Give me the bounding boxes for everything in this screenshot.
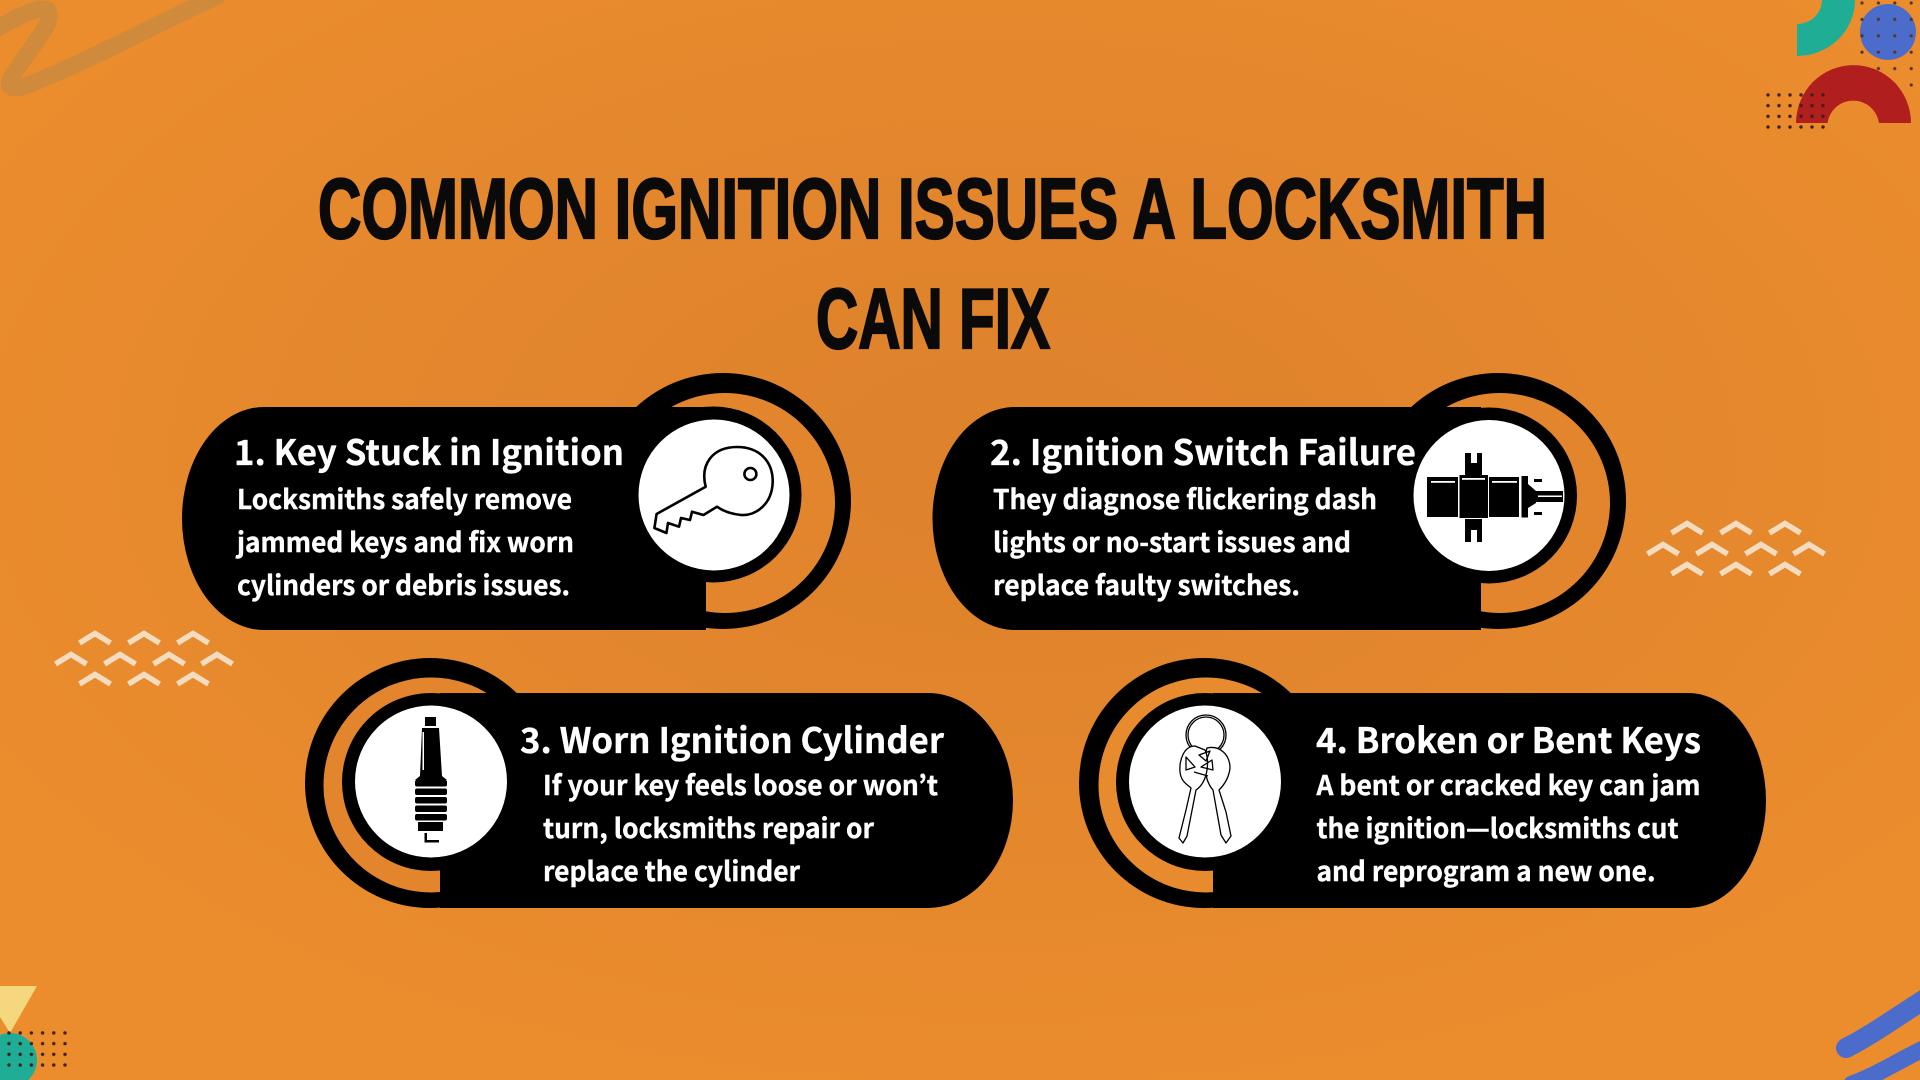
heading: card 2: 2. Ignition Switch Failure bbox=[990, 425, 1416, 476]
icon: spark plug bbox=[415, 717, 447, 842]
title: CAN FIX bbox=[816, 272, 1050, 367]
heading: card 3: 3. Worn Ignition Cylinder bbox=[520, 713, 945, 764]
text block: card 2: replace faulty switches. bbox=[993, 564, 1300, 603]
text block: card 3: turn, locksmiths repair or bbox=[543, 807, 874, 846]
decoration: top-right shapes bbox=[1762, 0, 1920, 132]
text block: card 3 bbox=[543, 764, 938, 889]
panel: card 2 ignition switch failure bbox=[932, 373, 1626, 630]
text block: card 4 bbox=[1316, 764, 1700, 889]
text block: card 1: Locksmiths safely remove bbox=[237, 478, 572, 517]
icon: bunch of keys bbox=[1179, 715, 1231, 843]
text block: card 3: If your key feels loose or won’t bbox=[543, 764, 938, 803]
text block: card 1: cylinders or debris issues. bbox=[237, 564, 570, 603]
heading: card 4: 4. Broken or Bent Keys bbox=[1316, 713, 1701, 764]
text block: card 2: They diagnose flickering dash bbox=[993, 478, 1377, 517]
text block: card 4: the ignition—locksmiths cut bbox=[1316, 807, 1678, 846]
text block: card 3: replace the cylinder bbox=[543, 850, 800, 889]
panel: card 4 broken or bent keys bbox=[1079, 658, 1766, 908]
text block: card 2: lights or no-start issues and bbox=[993, 521, 1351, 560]
icon: ignition switch bbox=[1427, 453, 1563, 542]
decoration: bottom-right blue strokes bbox=[1846, 999, 1920, 1080]
text block: card 4: and reprogram a new one. bbox=[1316, 850, 1656, 889]
text block: card 2 bbox=[993, 478, 1377, 603]
decoration: right chevrons bbox=[1648, 524, 1824, 574]
text block: card 1 bbox=[235, 478, 574, 603]
decoration: bottom-left shapes bbox=[0, 986, 71, 1080]
panel: card 3 worn ignition cylinder bbox=[305, 658, 1013, 908]
heading: card 1: 1. Key Stuck in Ignition bbox=[234, 425, 624, 476]
panel: card 1 key stuck in ignition bbox=[182, 373, 851, 630]
text block: card 4: A bent or cracked key can jam bbox=[1316, 764, 1700, 803]
decoration: left chevrons bbox=[56, 634, 232, 684]
decoration: top-left squiggle bbox=[0, 0, 218, 88]
title bbox=[318, 162, 1547, 367]
text block: card 1: jammed keys and fix worn bbox=[235, 521, 574, 560]
icon: key bbox=[654, 447, 773, 533]
